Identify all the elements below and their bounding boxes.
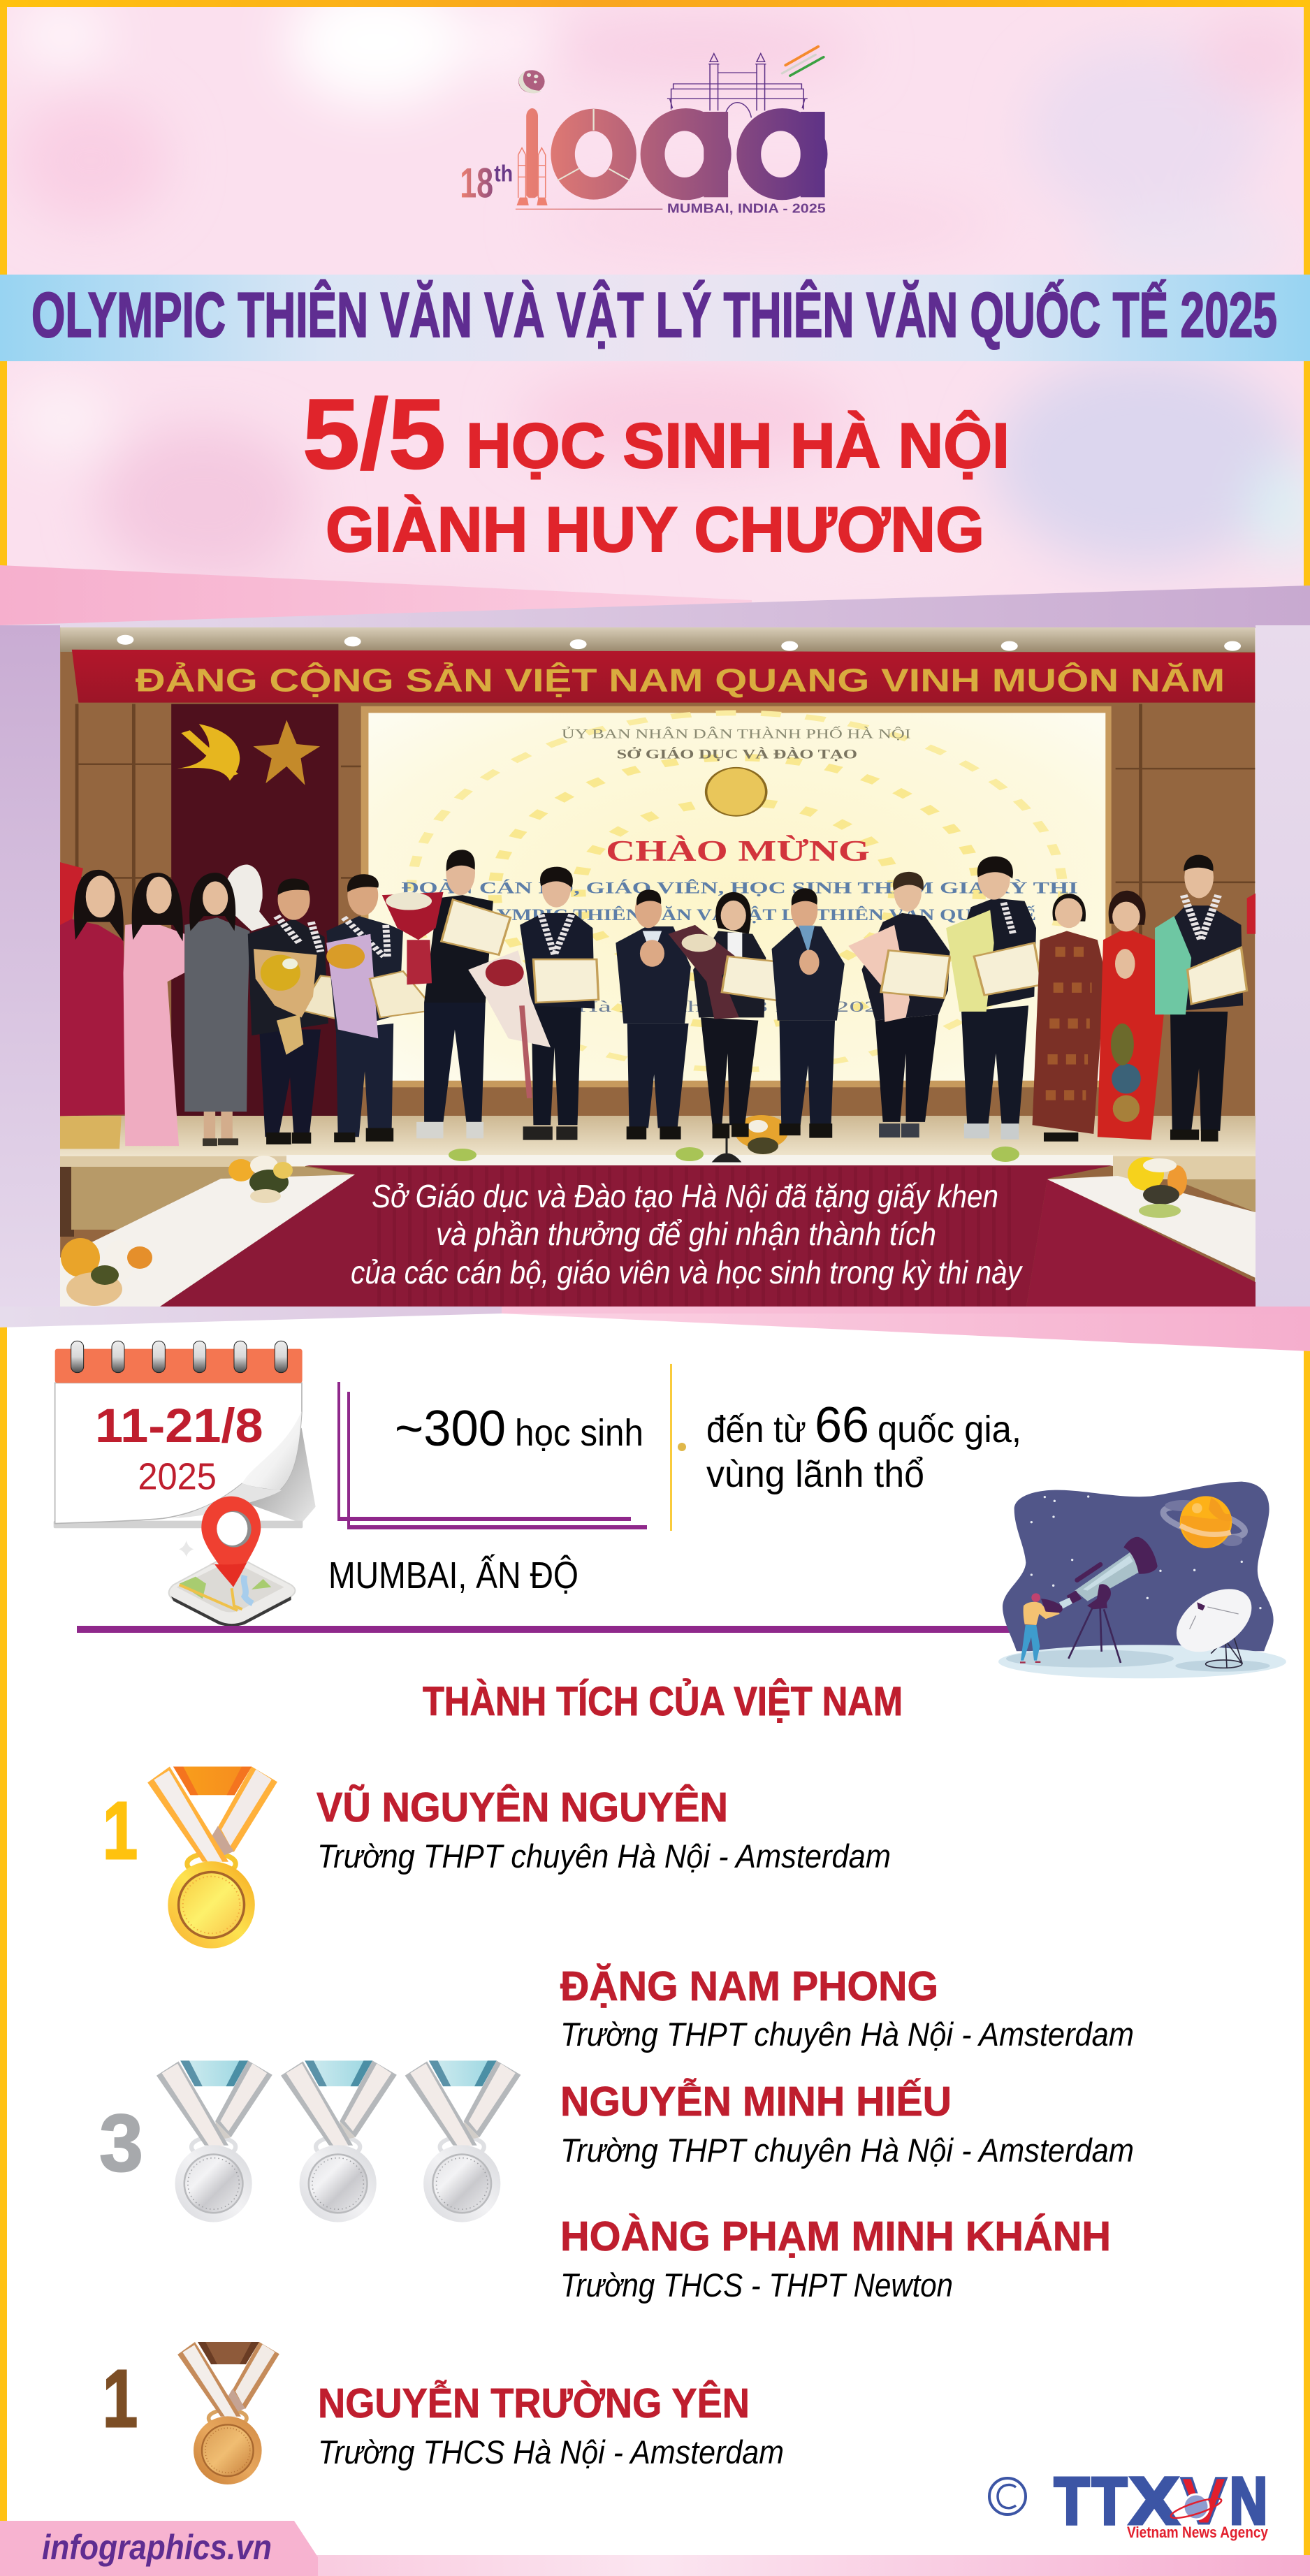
heading: achievements of Vietnam: THÀNH TÍCH CỦA VIỆT NAM	[423, 1679, 903, 1724]
people right group	[668, 855, 1258, 1142]
date: 11-21/8	[95, 1399, 263, 1453]
student with pink bouquet	[848, 872, 950, 1137]
TTXVN wordmark: T	[1054, 2464, 1089, 2538]
title: 5/5 hoc sinh Ha Noi gianh huy chuong: HỌC SINH HÀ NỘI	[466, 410, 1010, 481]
stat: number of students: học sinh	[515, 1412, 643, 1454]
winner: Nguyen Minh Hieu: Trường THPT chuyên Hà Nội - Amsterdam	[560, 2132, 1134, 2169]
table skirts and cloths	[60, 1165, 1256, 1307]
stat: number of students	[395, 1401, 643, 1457]
footer strip	[0, 2555, 1310, 2576]
tall student with red bouquet	[382, 850, 510, 1138]
woman in grey suit	[184, 873, 250, 1146]
table flowers and fruit	[61, 1115, 1187, 1306]
caption over photo: Sở Giáo dục và Đào tạo Hà Nội đã tặng giấy khen	[372, 1178, 998, 1214]
stat: number of countries: vùng lãnh thổ	[706, 1453, 924, 1495]
TTXVN wordmark	[1054, 2464, 1267, 2538]
count: 1 bronze: 1	[103, 2353, 138, 2444]
copyright symbol	[989, 2478, 1026, 2515]
logo: 18th IOAA Mumbai India 2025	[460, 47, 827, 216]
man with lilac bouquet	[326, 874, 435, 1142]
student at right end	[1155, 855, 1247, 1142]
man with sunflower bouquet	[248, 879, 347, 1144]
telescope	[1059, 1537, 1158, 1663]
gold medal row	[103, 1766, 891, 1949]
TTXVN wordmark: V	[1181, 2464, 1227, 2538]
winner: Nguyen Truong Yen	[318, 2380, 784, 2471]
stars	[1031, 1495, 1262, 1609]
logo letters	[526, 108, 827, 200]
projector screen: Hà Nội, tháng 8 năm 2025	[576, 998, 894, 1015]
icons: three silver medals	[157, 2060, 521, 2222]
student with roses	[468, 867, 599, 1140]
projector screen	[361, 706, 1112, 1087]
winner: Hoang Pham Minh Khanh	[560, 2213, 1111, 2304]
stat: number of countries: quốc gia,	[878, 1409, 1021, 1450]
icon: calendar with date	[54, 1341, 316, 1528]
corner bracket lines	[337, 1382, 647, 1529]
globe with orbit	[1169, 2494, 1223, 2522]
title: 5/5 hoc sinh Ha Noi gianh huy chuong	[303, 379, 1010, 565]
winner: Hoang Pham Minh Khanh: HOÀNG PHẠM MINH KHÁNH	[560, 2213, 1111, 2260]
winner: Hoang Pham Minh Khanh: Trường THCS - THPT Newton	[560, 2266, 953, 2304]
icon: tricolor streaks	[782, 47, 824, 75]
winner: Nguyen Truong Yen: Trường THCS Hà Nội - Amsterdam	[318, 2433, 784, 2471]
bronze medal row	[103, 2342, 784, 2484]
stat: number of students: ~300	[395, 1401, 506, 1457]
winner: Vu Nguyen Nguyen	[316, 1784, 891, 1875]
statue bust	[226, 864, 270, 931]
woman in red ao dai	[60, 870, 129, 1149]
location label: MUMBAI, ẤN ĐỘ	[328, 1555, 578, 1596]
winner: Nguyen Minh Hieu: NGUYỄN MINH HIẾU	[560, 2078, 952, 2125]
stat: number of countries: 66	[815, 1397, 869, 1453]
decorative ribbon under header	[0, 565, 1310, 628]
purple divider bar	[77, 1626, 1017, 1633]
TTXVN wordmark: X	[1130, 2464, 1179, 2538]
official with blue tie	[772, 888, 845, 1138]
count: 1 gold: 1	[103, 1785, 138, 1876]
icon: map with location pin	[169, 1497, 295, 1627]
logo: copyright TTXVN Vietnam News Agency	[989, 2464, 1269, 2541]
winner: Nguyen Truong Yen: NGUYỄN TRƯỜNG YÊN	[318, 2380, 750, 2426]
student with yellow bouquet	[946, 857, 1042, 1140]
panel: photo side bands	[0, 625, 1310, 1351]
winner: Dang Nam Phong: ĐẶNG NAM PHONG	[560, 1963, 938, 2009]
woman in red ao dai with pattern	[1098, 891, 1168, 1140]
woman in brown ao dai	[1033, 894, 1105, 1142]
female student with bouquet	[668, 892, 784, 1138]
icon: moon	[518, 70, 545, 94]
caption over photo: và phần thưởng để ghi nhận thành tích	[436, 1216, 936, 1252]
TTXVN wordmark: N	[1230, 2464, 1267, 2538]
projector screen: CHÀO MỪNG	[606, 835, 870, 867]
icon: bronze medal	[177, 2342, 279, 2484]
text: 18th: th	[494, 161, 513, 187]
icon: rocket boosters	[518, 148, 547, 205]
winner: Nguyen Minh Hieu	[560, 2078, 1134, 2169]
winner: Vu Nguyen Nguyen: VŨ NGUYÊN NGUYÊN	[316, 1784, 728, 1831]
title: 5/5 hoc sinh Ha Noi gianh huy chuong: GIÀNH HUY CHƯƠNG	[326, 495, 984, 565]
satellite dish	[1165, 1576, 1263, 1668]
winner: Dang Nam Phong: Trường THPT chuyên Hà Nội - Amsterdam	[560, 2016, 1134, 2053]
night sky blob	[1003, 1482, 1274, 1651]
silver medal row	[99, 1963, 1134, 2304]
icon: gold medal	[147, 1766, 277, 1949]
text: Mumbai India 2025: MUMBAI, INDIA - 2025	[667, 202, 826, 216]
wood wall panels	[77, 704, 1255, 1119]
text: 18th: 18	[460, 159, 493, 206]
room background	[60, 627, 1255, 1307]
projector screen: OLYMPIC THIÊN VĂN VÀ VẬT LÝ THIÊN VĂN QUỐC TẾ	[468, 905, 1036, 924]
count: 3 silver: 3	[99, 2097, 143, 2188]
banner	[72, 650, 1255, 703]
footer tab: infographics.vn: infographics.vn	[42, 2528, 272, 2567]
projector screen: ĐOÀN CÁN BỘ, GIÁO VIÊN, HỌC SINH THAM GIA KỲ THI	[401, 880, 1078, 897]
stat: number of countries	[706, 1397, 1021, 1495]
flag at right	[1247, 892, 1258, 934]
TTXVN wordmark: T	[1092, 2464, 1127, 2538]
projector screen: SỞ GIÁO DỤC VÀ ĐÀO TẠO	[617, 746, 857, 762]
people left group	[60, 850, 691, 1149]
stage floor and side furniture	[60, 1116, 1256, 1237]
ceiling with lights	[60, 627, 1255, 652]
woman in pink ao dai	[124, 873, 184, 1146]
footer tab: infographics.vn	[0, 2521, 318, 2576]
official in dark suit	[616, 889, 691, 1140]
panel: watercolor header background	[7, 0, 1310, 622]
observer	[1020, 1593, 1063, 1664]
caption over photo	[351, 1178, 1024, 1290]
projector screen: ỦY BAN NHÂN DÂN THÀNH PHỐ HÀ NỘI	[562, 726, 911, 741]
stat: number of countries: đến từ	[706, 1409, 806, 1450]
ground	[998, 1645, 1286, 1678]
planet with rings	[1160, 1496, 1248, 1548]
title: 5/5 hoc sinh Ha Noi gianh huy chuong: 5/5	[303, 379, 446, 490]
caption over photo: của các cán bộ, giáo viên và học sinh trong kỳ thi này	[351, 1254, 1024, 1290]
winner: Vu Nguyen Nguyen: Trường THPT chuyên Hà Nội - Amsterdam	[317, 1838, 891, 1875]
photo: award ceremony	[60, 627, 1258, 1307]
yellow divider with dot	[670, 1364, 686, 1531]
illustration: telescope and planet	[998, 1482, 1286, 1678]
tagline: Vietnam News Agency	[1127, 2524, 1269, 2541]
year: 2025	[138, 1457, 217, 1498]
winner: Dang Nam Phong	[560, 1963, 1134, 2053]
icon: gateway of India outline	[667, 54, 808, 117]
curtain with emblem	[171, 704, 338, 1123]
flag at left	[60, 862, 83, 928]
